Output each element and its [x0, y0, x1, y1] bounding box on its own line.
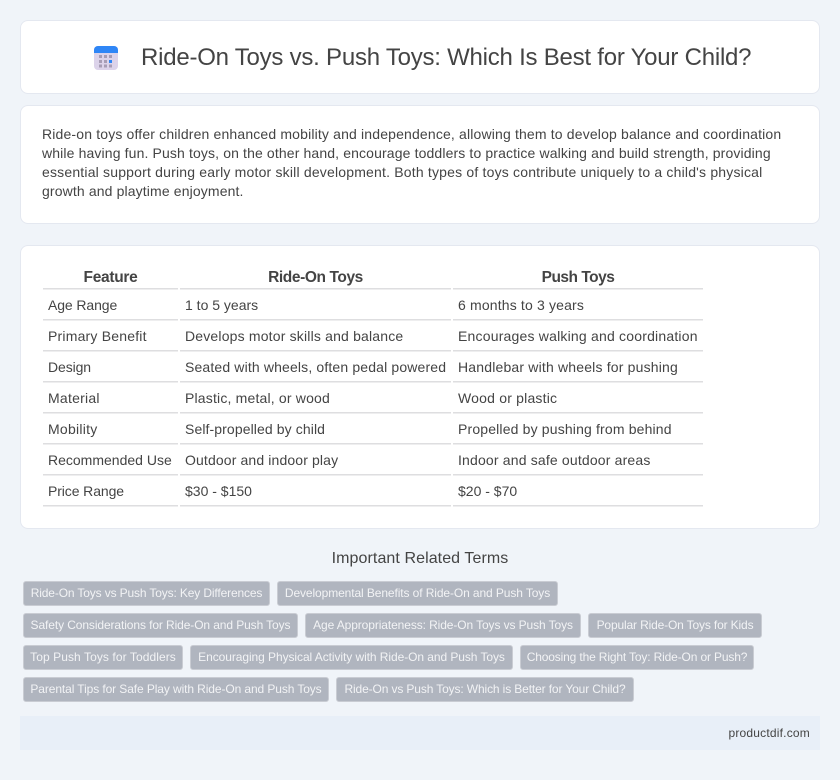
- tag list: related terms: Parental Tips for Safe Play with Ride-On and Push Toys: [30, 682, 322, 696]
- footer: [20, 716, 820, 750]
- table: feature comparison: Price Range: [48, 483, 124, 499]
- table: feature comparison: Handlebar with wheels for pushing: [458, 359, 678, 375]
- table: feature comparison: Recommended Use: [48, 452, 172, 468]
- table: feature comparison: Plastic, metal, or wood: [185, 390, 330, 406]
- tag list: related terms: Developmental Benefits of Ride-On and Push Toys: [285, 586, 550, 600]
- table: feature comparison: 6 months to 3 years: [458, 297, 584, 313]
- panel: header: [20, 20, 820, 94]
- tag list: related terms: Safety Considerations for Ride-On and Push Toys: [31, 618, 290, 632]
- table: feature comparison: $30 - $150: [185, 483, 252, 499]
- tag list: related terms: Ride-On vs Push Toys: Which is Better for Your Child?: [344, 682, 626, 696]
- table: feature comparison: Develops motor skills and balance: [185, 328, 403, 344]
- text block: introduction: Ride-on toys offer children enhanced mobility and independence, allowing them to develop balance and coordination: [42, 126, 781, 142]
- title: Ride-On Toys vs. Push Toys: Which Is Best for Your Child?: [141, 44, 751, 71]
- text block: introduction: [42, 126, 781, 199]
- table: feature comparison: Ride-On Toys: [268, 269, 363, 286]
- tag list: related terms: Encouraging Physical Activity with Ride-On and Push Toys: [198, 650, 505, 664]
- text block: introduction: while having fun. Push toys, on the other hand, encourage toddlers to practice walking and build strength, providing: [42, 145, 771, 161]
- icon: calendar: [94, 46, 118, 70]
- tag list: related terms: Ride-On Toys vs Push Toys: Key Differences: [31, 586, 262, 600]
- tag list: related terms: Age Appropriateness: Ride-On Toys vs Push Toys: [313, 618, 573, 632]
- table: feature comparison: Propelled by pushing from behind: [458, 421, 672, 437]
- table: feature comparison: Seated with wheels, often pedal powered: [185, 359, 446, 375]
- table: feature comparison: $20 - $70: [458, 483, 517, 499]
- table: feature comparison: Push Toys: [542, 269, 614, 286]
- tag list: related terms: Popular Ride-On Toys for Kids: [597, 618, 753, 632]
- table: feature comparison: Age Range: [48, 297, 117, 313]
- footer: productdif.com: [728, 726, 810, 740]
- tag list: related terms: [23, 581, 762, 702]
- table: feature comparison: Design: [48, 359, 91, 375]
- table: feature comparison: Primary Benefit: [48, 328, 147, 344]
- table: feature comparison: [43, 269, 703, 507]
- text block: introduction: growth and playtime enjoyment.: [42, 183, 244, 199]
- tag list: related terms: Choosing the Right Toy: Ride-On or Push?: [527, 650, 747, 664]
- heading: related terms: Important Related Terms: [332, 550, 508, 567]
- panel: introduction: [20, 105, 820, 224]
- table: feature comparison: Mobility: [48, 421, 97, 437]
- table: feature comparison: Material: [48, 390, 100, 406]
- table: feature comparison: Indoor and safe outdoor areas: [458, 452, 651, 468]
- panel: comparison table: [20, 245, 820, 529]
- table: feature comparison: Self-propelled by child: [185, 421, 325, 437]
- table: feature comparison: Wood or plastic: [458, 390, 557, 406]
- table: feature comparison: Encourages walking and coordination: [458, 328, 698, 344]
- table: feature comparison: 1 to 5 years: [185, 297, 258, 313]
- table: feature comparison: Outdoor and indoor play: [185, 452, 338, 468]
- text block: introduction: essential support during early motor skill development. Both types of toys contribute uniquely to a child's physical: [42, 164, 762, 180]
- table: feature comparison: Feature: [84, 269, 137, 286]
- tag list: related terms: Top Push Toys for Toddlers: [30, 650, 176, 664]
